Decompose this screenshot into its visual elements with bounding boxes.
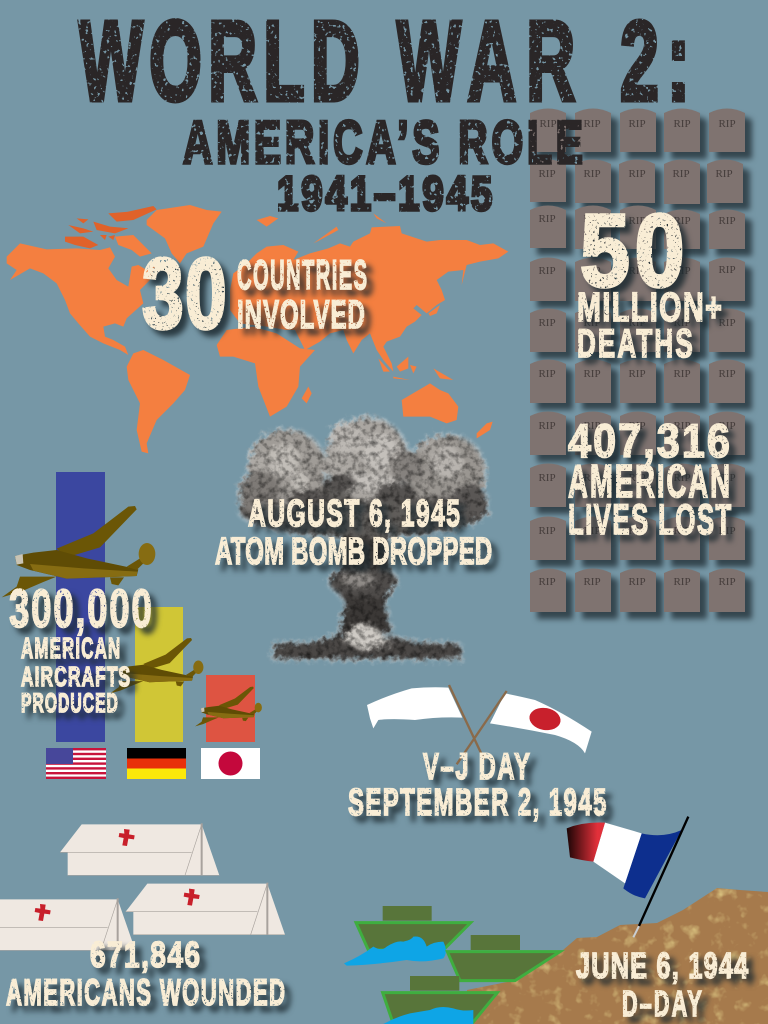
stat: American lives lost: AMERICAN: [568, 457, 730, 508]
title: WORLD: [79, 0, 360, 124]
RIP labels on tombstones: RIP: [538, 213, 556, 225]
RIP labels on tombstones: RIP: [583, 213, 601, 225]
RIP labels on tombstones: RIP: [628, 472, 646, 484]
title: 1941–1945: [277, 168, 492, 221]
RIP labels on tombstones: RIP: [538, 472, 556, 484]
title: 2:: [620, 0, 690, 124]
bar chart: aircraft production: [56, 472, 255, 742]
RIP labels on tombstones: RIP: [718, 215, 736, 227]
world map: [7, 205, 508, 453]
RIP labels on tombstones: RIP: [538, 525, 556, 537]
RIP labels on tombstones: RIP: [628, 118, 646, 130]
stat: 300,000 aircraft: [9, 578, 152, 718]
RIP labels on tombstones: RIP: [628, 420, 646, 432]
RIP labels on tombstones: RIP: [673, 368, 691, 380]
stat: 50 million+ deaths: DEATHS: [577, 321, 693, 366]
stat: 30 countries involved: INVOLVED: [237, 292, 365, 336]
icon: V-J day crossed flags: [367, 685, 592, 764]
RIP labels on tombstones: RIP: [538, 317, 556, 329]
icon: medical tents: [0, 823, 285, 950]
RIP labels on tombstones: RIP: [673, 265, 691, 277]
RIP labels on tombstones: RIP: [583, 168, 601, 180]
RIP labels on tombstones: RIP: [583, 472, 601, 484]
RIP labels on tombstones: RIP: [538, 168, 556, 180]
beach land: [467, 888, 768, 1024]
icon: large bomber: [2, 506, 155, 597]
RIP labels on tombstones: RIP: [718, 525, 736, 537]
RIP labels on tombstones: RIP: [583, 420, 601, 432]
icon: French flag: [567, 817, 688, 937]
RIP labels on tombstones: RIP: [628, 368, 646, 380]
RIP labels on tombstones: RIP: [583, 368, 601, 380]
stat: D-Day: D–DAY: [622, 984, 702, 1024]
RIP labels on tombstones: RIP: [718, 420, 736, 432]
icon: small bomber: [195, 687, 262, 726]
stat: V-J day: V–J DAY: [423, 746, 530, 787]
RIP labels on tombstones: RIP: [673, 118, 691, 130]
title: [79, 0, 690, 221]
RIP labels on tombstones: RIP: [672, 168, 690, 180]
RIP labels on tombstones: RIP: [583, 525, 601, 537]
RIP labels on tombstones: RIP: [718, 118, 736, 130]
icon: Japanese flag: [201, 748, 260, 779]
icon: German flag: [127, 748, 186, 779]
RIP labels on tombstones: RIP: [718, 576, 736, 588]
stat: 50 million+ deaths: 50: [580, 194, 684, 308]
RIP labels on tombstones: RIP: [628, 215, 646, 227]
RIP labels on tombstones: RIP: [673, 472, 691, 484]
stat: American lives lost: LIVES LOST: [568, 495, 731, 544]
title: AMERICA’S ROLE: [183, 109, 583, 176]
RIP labels on tombstones: RIP: [628, 576, 646, 588]
stat: 300,000 aircraft: PRODUCED: [21, 688, 118, 718]
stat: 30 countries involved: [142, 237, 367, 349]
RIP labels on tombstones: RIP: [538, 265, 556, 277]
stat: V-J day: [348, 746, 606, 823]
stat: American lives lost: [568, 416, 731, 544]
RIP labels on tombstones: RIP: [583, 118, 601, 130]
stat: Americans wounded: AMERICANS WOUNDED: [6, 972, 285, 1013]
RIP labels on tombstones: RIP: [538, 576, 556, 588]
icon: medium bomber: [110, 638, 203, 694]
mushroom cloud: [238, 417, 488, 660]
RIP labels on tombstones: RIP: [718, 264, 736, 276]
title: WAR: [397, 0, 575, 124]
RIP labels on tombstones: RIP: [628, 525, 646, 537]
stat: D-Day: [576, 946, 749, 1024]
stat: V-J day: SEPTEMBER 2, 1945: [348, 780, 606, 823]
RIP labels on tombstones: RIP: [538, 420, 556, 432]
stat: 50 million+ deaths: [577, 194, 722, 366]
RIP labels on tombstones: RIP: [628, 168, 646, 180]
stat: atom bomb date: ATOM BOMB DROPPED: [215, 529, 492, 572]
icon: US flag: [46, 748, 106, 779]
panel: RIP tombstones: [530, 108, 745, 612]
RIP labels on tombstones: RIP: [628, 317, 646, 329]
icon: landing boats: [344, 906, 560, 1024]
RIP labels on tombstones: RIP: [718, 368, 736, 380]
RIP labels on tombstones: RIP: [673, 420, 691, 432]
stat: American lives lost: 407,316: [568, 416, 730, 468]
RIP labels on tombstones: RIP: [628, 265, 646, 277]
RIP labels on tombstones: RIP: [718, 472, 736, 484]
RIP labels on tombstones: RIP: [673, 525, 691, 537]
stat: 300,000 aircraft: 300,000: [9, 578, 152, 639]
stat: 50 million+ deaths: MILLION+: [577, 285, 722, 330]
RIP labels on tombstones: RIP: [673, 317, 691, 329]
stat: 30 countries involved: COUNTRIES: [237, 251, 367, 298]
stat: atom bomb date: AUGUST 6, 1945: [248, 492, 460, 534]
RIP labels on tombstones: RIP: [583, 317, 601, 329]
stat: 300,000 aircraft: AIRCRAFTS: [21, 661, 130, 692]
stat: Americans wounded: [6, 935, 285, 1013]
stat: atom bomb date: [215, 492, 492, 572]
RIP labels on tombstones: RIP: [673, 576, 691, 588]
RIP labels on tombstones: RIP: [673, 215, 691, 227]
RIP labels on tombstones: RIP: [583, 576, 601, 588]
RIP labels on tombstones: RIP: [715, 168, 733, 180]
stat: 300,000 aircraft: AMERICAN: [21, 634, 120, 665]
stat: 30 countries involved: 30: [142, 237, 227, 349]
RIP labels on tombstones: RIP: [718, 317, 736, 329]
RIP labels on tombstones: [538, 118, 736, 588]
RIP labels on tombstones: RIP: [538, 368, 556, 380]
stat: Americans wounded: 671,846: [90, 935, 200, 975]
RIP labels on tombstones: RIP: [539, 118, 557, 130]
stat: D-Day: JUNE 6, 1944: [576, 946, 749, 986]
RIP labels on tombstones: RIP: [583, 265, 601, 277]
